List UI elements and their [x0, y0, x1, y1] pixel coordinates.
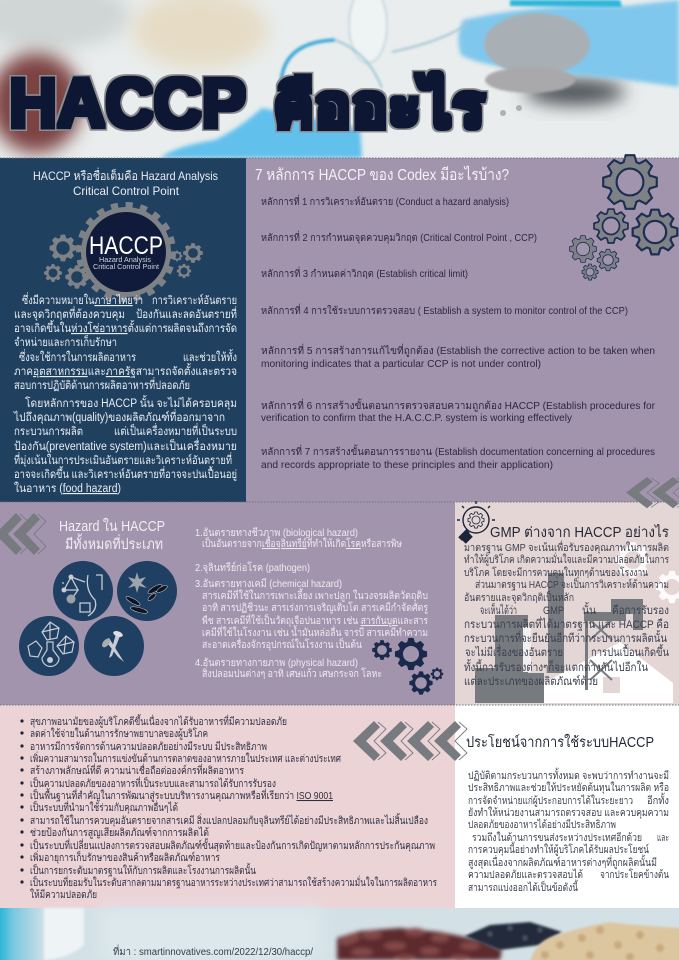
benefit items: สุขภาพอนามัยของผู้บริโภคดีขึ้นเนื่องจากได้รับอาหารที่มีความปลอดภัย — [30, 714, 287, 728]
bullets — [20, 719, 24, 884]
benefit items: เป็นระบบที่เปลี่ยนแปลงการตรวจสอบผลิตภัณฑ์ขั้นสุดท้ายและป้องกันการเกิดปัญหาตามหลักการประกันคุณภาพ — [30, 838, 435, 852]
benefit items — [30, 714, 437, 901]
icon: chemical hazard — [19, 616, 79, 676]
benefit items: เป็นพื้นฐานที่สำคัญในการพัฒนาสู่ระบบบริหารงานคุณภาพหรือที่เรียกว่า ISO 9001 — [30, 788, 333, 802]
panel: 7 principles — [246, 155, 679, 502]
GMP text — [464, 540, 669, 688]
chevrons — [353, 721, 467, 761]
definition text: ป้องกันและลดอันตรายที่ — [136, 306, 237, 321]
beans: chickpeas — [530, 922, 679, 960]
GMP text: จะเห็นได้ว่า — [480, 602, 517, 617]
benefits text: ปลอดภัยของอาหารได้อย่างมีประสิทธิภาพ — [468, 818, 616, 831]
title — [9, 64, 485, 142]
benefit items: เพิ่มความสามารถในการแข่งขันด้านการตลาดของอาหารภายในประเทศ และต่างประเทศ — [30, 751, 341, 765]
intro heading — [33, 167, 218, 198]
icon: dark gears — [372, 638, 443, 695]
source credit: ที่มา : smartinnovatives.com/2022/12/30/haccp/ — [113, 944, 313, 958]
hazard list: 2.จุลินทรีย์ก่อโรค (pathogen) — [195, 561, 310, 574]
definition text: ภาคอุตสาหกรรมและภาครัฐสามารถจัดตั้งและตรวจ — [14, 363, 237, 378]
chevrons over GMP panel — [626, 477, 679, 508]
GMP text: อันตรายและจุดวิกฤติเป็นหลัก — [464, 590, 574, 604]
bottom banner photo — [0, 908, 679, 960]
definition text: ซึ่งมีความหมายในภาษาไทยว่า — [22, 292, 143, 307]
hazard list: สิ่งปลอมปนต่างๆ อาทิ เศษแก้ว เศษกระจก โลหะ — [202, 666, 382, 680]
HACCP gear logo: Hazard Analysis — [99, 257, 152, 264]
definition text: ซึ่งจะใช้การในการผลิตอาหาร — [19, 349, 136, 364]
GMP text: แต่ละประเภทของผลิตภัณฑ์ด้วย — [464, 674, 598, 688]
hazard heading: Hazard ใน HACCP — [59, 517, 165, 535]
benefits heading: ประโยชน์จากการใช้ระบบHACCP — [466, 733, 654, 751]
principles list: หลักการที่ 6 การสร้างขั้นตอนการตรวจสอบความถูกต้อง HACCP (Establish procedures for — [261, 398, 656, 412]
hazard list: 3.อันตรายทางเคมี (chemical hazard) — [195, 577, 342, 590]
icon: lightbulb gear — [457, 501, 495, 542]
principles list: หลักการที่ 5 การสร้างการแก้ไขที่ถูกต้อง (Establish the corrective action to be taken when — [261, 343, 655, 357]
principles list: verification to confirm that the H.A.C.C.P. system is working effectively — [261, 413, 572, 424]
principles list: หลักการที่ 3 กำหนดค่าวิกฤต (Establish critical limit) — [261, 266, 468, 280]
definition text: จำหน่ายและการเก็บรักษา — [14, 334, 117, 349]
panel: hazard types — [0, 502, 455, 705]
principles list: หลักการที่ 4 การใช้ระบบการตรวจสอบ ( Establish a system to monitor control of the CCP) — [261, 303, 628, 317]
benefits text: และ — [657, 832, 669, 844]
definition text: ไปถึงคุณภาพ(quality)ของผลิตภัณฑ์ที่ออกมาจาก — [13, 409, 225, 424]
definition text: ในอาหาร (food hazard) — [14, 482, 121, 495]
hazard list: อาทิ สารปฏิชีวนะ สารเร่งการเจริญเติบโต สารเคมีกำจัดศัตรู — [202, 601, 428, 614]
intro heading: Critical Control Point — [73, 184, 180, 198]
panel: benefits list — [0, 705, 455, 908]
HACCP gear logo: Critical Control Point — [93, 264, 159, 271]
hazard list: พืช สารเคมีที่ใช้เป็นวัตถุเจือปนอาหาร เช่น สารกันบูดและสาร — [202, 613, 428, 627]
principles list: หลักการที่ 2 การกำหนดจุดควบคุมวิกฤต (Critical Control Point , CCP) — [261, 230, 537, 244]
definition text: และช่วยให้ทั้ง — [183, 349, 237, 364]
definition text: อาจเกิดขึ้นในห่วงโซ่อาหารตั้งแต่การผลิตจนถึงการจัด — [14, 320, 237, 335]
benefit items: สามารถใช้ในการควบคุมอันตรายจากสารเคมี สิ่งแปลกปลอมกับจุลินทรีย์ได้อย่างมีประสิทธิภาพและไม่สิ้นเปลือง — [30, 813, 428, 827]
heading: 7 principles: 7 หลักการ HACCP ของ Codex มีอะไรบ้าง? — [255, 165, 509, 184]
benefits text: อีกทั้ง — [647, 792, 669, 807]
definition text: ที่มุ่งเน้นในการประเมินอันตรายและวิเคราะห์อันตรายที่ — [14, 452, 232, 467]
hazard list: 4.อันตรายทางกายภาพ (physical hazard) — [195, 657, 358, 669]
GMP text: จะไม่มีเรื่องของอันตราย — [465, 644, 563, 659]
principles list: and records appropriate to these principles and their application) — [261, 460, 553, 471]
benefit items: เพิ่มอายุการเก็บรักษาของสินค้าหรือผลิตภัณฑ์อาหาร — [30, 850, 220, 864]
benefit items: เป็นระบบที่ยอมรับในระดับสากลตามมาตรฐานอาหารระหว่างประเทศว่าสามารถใช้สร้างความมั่นใจในการผลิตอาหาร — [30, 875, 437, 889]
chevrons — [0, 513, 46, 555]
HACCP gear logo — [44, 206, 203, 298]
beans: black — [465, 922, 562, 950]
benefit items: สร้างภาพลักษณ์ที่ดี ความน่าเชื่อถือต่อองค์กรที่ผลิตอาหาร — [30, 763, 244, 777]
benefit items: ลดค่าใช้จ่ายในด้านการรักษาพยาบาลของผู้บริโภค — [30, 727, 208, 740]
GMP text: ทั้งนี้การรับรองต่างๆก็จะแตกต่างกันไปอีกใน — [464, 659, 648, 674]
definition text: กระบวนการผลิต — [14, 425, 83, 438]
definition text: แต่เป็นเครื่องหมายที่เป็นระบบ — [114, 423, 237, 438]
factory background illustration — [475, 542, 679, 703]
principles list: หลักการที่ 1 การวิเคราะห์อันตราย (Conduct a hazard analysis) — [261, 194, 509, 208]
panel: what is HACCP — [0, 158, 246, 502]
title: คืออะไร — [273, 71, 485, 140]
GMP text: คือการรับรอง — [612, 604, 669, 617]
hazard list: 1.อันตรายทางชีวภาพ (biological hazard) — [195, 526, 358, 539]
benefits text — [468, 767, 669, 894]
panel: benefits summary — [353, 705, 679, 908]
benefit items: อาหารมีการจัดการด้านความปลอดภัยอย่างมีระบบ มีประสิทธิภาพ — [30, 740, 267, 753]
hazard list: สะอาดเครื่องจักรอุปกรณ์ในโรงงาน เป็นต้น — [202, 637, 362, 651]
intro heading: HACCP หรือชื่อเต็มคือ Hazard Analysis — [33, 167, 218, 183]
benefit items: เป็นการยกระดับมาตรฐานให้กับการผลิตและโรงงานการผลิตนั้น — [30, 863, 256, 877]
definition text: สอบการปฏิบัติด้านการผลิตอาหารที่ปลอดภัย — [14, 377, 190, 392]
icon: bacteria — [117, 561, 177, 621]
GMP text: GMP — [543, 605, 564, 617]
beans: kidney — [337, 928, 502, 960]
benefit items: เป็นระบบที่นำมาใช้ร่วมกับคุณภาพอื่นๆได้ — [30, 800, 178, 814]
definition text: อาจจะเกิดขึ้น และวิเคราะห์อันตรายที่อาจจะปนเปื้อนอยู่ — [14, 466, 237, 481]
GMP text: นั้น — [582, 602, 596, 617]
benefits text: ความปลอดภัยและตรวจสอบได้ — [468, 868, 583, 881]
principles list: หลักการที่ 7 การสร้างขั้นตอนการรายงาน (Establish documentation concerning al procedures — [261, 444, 655, 458]
benefit items: ช่วยป้องกันการสูญเสียผลิตภัณฑ์จากการผลิตได้ — [30, 826, 209, 839]
hazard list: เคมีที่ใช้ในโรงงาน เช่น น้ำมันหล่อลื่น จารบี สารเคมีทำความ — [202, 625, 428, 639]
definition text: โดยหลักการของ HACCP นั้น จะไม่ได้ครอบคลุม — [25, 395, 237, 410]
benefit items: ให้มีความปลอดภัย — [30, 888, 97, 901]
hazard list: สารเคมีที่ใช้ในการเพาะเลี้ยง เพาะปลูก ในวงจรผลิตวัตถุดิบ — [202, 588, 428, 602]
icon: physical hazard nails — [84, 616, 144, 676]
hazard list — [195, 526, 428, 680]
definition text: ป้องกัน(preventative system)และเป็นเครื่องหมาย — [14, 438, 237, 453]
principles list — [261, 194, 656, 471]
principles list: monitoring indicates that a particular CCP is not under control) — [261, 359, 541, 370]
icon: biological hazard — [53, 561, 113, 621]
hazard list: เป็นอันตรายจากเชื้อจุลินทรีย์ที่ทำให้เกิดโรคหรือสารพิษ — [202, 536, 402, 550]
benefit items: เป็นความปลอดภัยของอาหารที่เป็นระบบและสามารถได้รับการรับรอง — [30, 776, 276, 790]
benefits text: การจัดจำหน่ายแก่ผู้ประกอบการได้ในระยะยาว — [468, 794, 633, 807]
icon: gears — [570, 155, 677, 280]
definition text — [13, 292, 237, 495]
title: HACCP — [9, 64, 246, 142]
hazard heading: มีทั้งหมดที่ประเภท — [65, 533, 163, 553]
panel: GMP vs HACCP — [455, 501, 679, 705]
hazard heading — [59, 517, 165, 553]
GMP heading: GMP ต่างจาก HACCP อย่างไร — [490, 523, 669, 541]
HACCP gear logo: HACCP — [89, 232, 163, 260]
section dotted dividers — [0, 158, 679, 705]
definition text: การวิเคราะห์อันตราย — [152, 293, 237, 307]
top banner photo — [0, 0, 679, 158]
definition text: และจุดวิกฤตที่ต้องควบคุม — [14, 306, 125, 321]
benefits text: สามารถแบ่งออกได้เป็นข้อดังนี้ — [468, 879, 578, 894]
benefits text: รวมถึงในด้านการขนส่งระหว่างประเทศอีกด้วย — [472, 831, 642, 844]
